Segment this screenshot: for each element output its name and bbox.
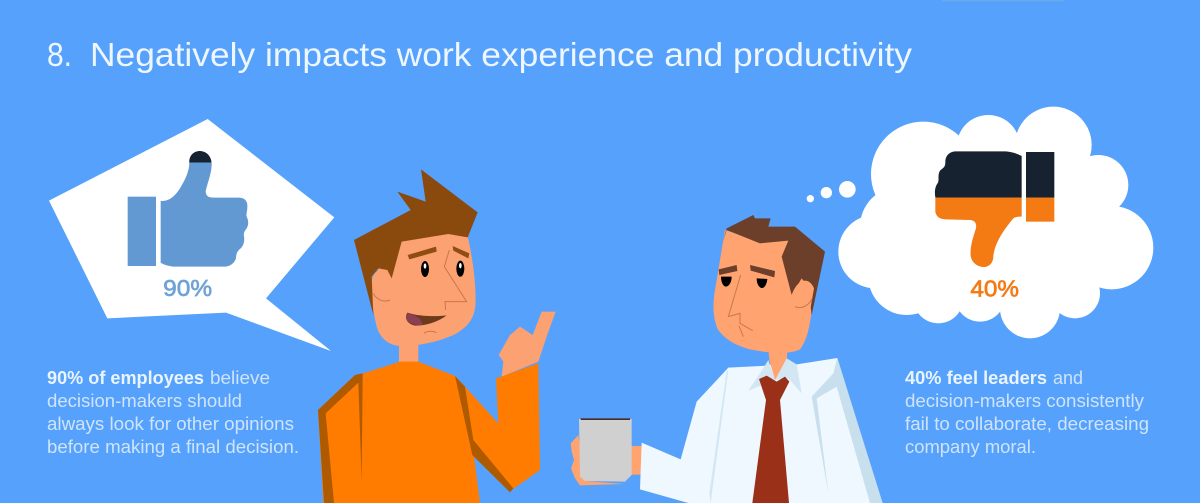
- text block: 40% feel leaders: [905, 368, 1149, 457]
- speech bubble: 90%: [49, 119, 334, 351]
- shirt shading: [812, 358, 883, 503]
- neck: [768, 348, 787, 380]
- text block: 40% feel leaders: and: [1053, 368, 1083, 388]
- neck: [399, 337, 418, 367]
- icon: thumbs down: [935, 151, 1054, 267]
- thought cloud: 40%: [807, 107, 1153, 338]
- text block: 40% feel leaders: decision-makers consistently: [905, 391, 1144, 411]
- text block: 90% of employees: 90% of employees: [47, 368, 204, 388]
- hand: [499, 312, 556, 377]
- ear: [792, 281, 814, 309]
- text block: 90% of employees: always look for other opinions: [47, 414, 294, 434]
- tie: [752, 376, 789, 503]
- 40% label: 40%: [970, 275, 1019, 301]
- text block: 40% feel leaders: company moral.: [905, 437, 1036, 457]
- character: man in orange sweater: [318, 169, 556, 503]
- nose and mouth lines: [728, 275, 753, 337]
- coffee mug: [579, 418, 632, 482]
- chin crease: [424, 331, 437, 333]
- face: [713, 230, 813, 353]
- thought dots: [807, 181, 856, 202]
- title: 8.: [47, 36, 72, 73]
- eyes: [421, 261, 429, 277]
- character: man in white shirt: [571, 215, 883, 503]
- face: [370, 232, 476, 346]
- text block: 40% feel leaders: fail to collaborate, decreasing: [905, 414, 1149, 434]
- hair: [722, 215, 825, 315]
- ear: [372, 271, 390, 300]
- text block: 90% of employees: [47, 368, 299, 457]
- text block: 40% feel leaders: 40% feel leaders: [905, 368, 1047, 388]
- hair: [354, 169, 478, 315]
- collar: [748, 360, 775, 391]
- title: Negatively impacts work experience and productivity: [90, 36, 913, 73]
- eyebrows: [408, 247, 437, 259]
- 90% label: 90%: [163, 275, 212, 301]
- sweater shading: [318, 373, 363, 503]
- text block: 90% of employees: before making a final decision.: [47, 437, 299, 457]
- eyes: [721, 277, 732, 287]
- nose: [444, 250, 467, 310]
- sweater: [318, 362, 540, 503]
- icon: thumbs up: [128, 151, 248, 267]
- text block: 90% of employees: decision-makers should: [47, 391, 242, 411]
- mouth: [406, 313, 447, 326]
- hand and wrist: [571, 435, 625, 485]
- text block: 90% of employees: believe: [210, 368, 270, 388]
- shirt: [640, 358, 882, 503]
- cloud shape: [838, 107, 1153, 338]
- eyebrows: [719, 265, 737, 275]
